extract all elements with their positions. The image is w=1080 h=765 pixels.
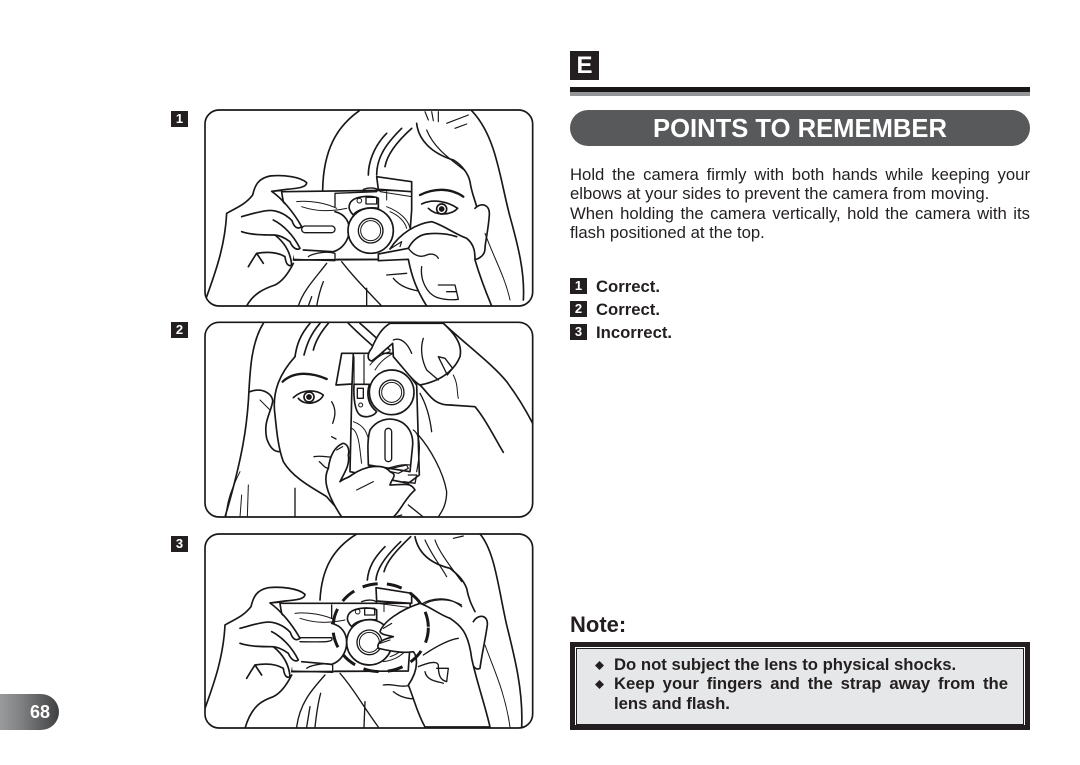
double header rule: [570, 87, 1030, 96]
left hand: [205, 587, 305, 728]
panel badge 3: 3: [176, 536, 183, 551]
body text: When holding the camera vertically, hold the camera with its: [570, 204, 1030, 223]
note text 2: Keep your fingers and the strap away from the: [614, 674, 1008, 693]
camera: [282, 190, 412, 260]
panel badge 1: 1: [176, 111, 183, 126]
illustration panel 2: correct vertical grip: [205, 322, 533, 517]
body text: [570, 165, 1030, 242]
camera: [350, 353, 419, 483]
right hand over lens: [378, 603, 490, 727]
illustration panel 3: incorrect grip with dashed circle over lens and flash: [205, 534, 533, 728]
note text 1: Do not subject the lens to physical shocks.: [614, 655, 956, 674]
list of captions: [570, 277, 672, 342]
note bullet 1: [595, 661, 604, 670]
section letter E: [570, 51, 599, 80]
list of captions: Incorrect.: [596, 323, 672, 342]
camera: [280, 603, 412, 672]
body text: flash positioned at the top.: [570, 223, 765, 242]
page number tab: [0, 694, 59, 730]
note text 3: lens and flash.: [614, 694, 730, 713]
list of captions: 2: [575, 301, 582, 316]
list of captions: 3: [575, 324, 582, 339]
title pill: POINTS TO REMEMBER: [653, 115, 947, 143]
upper hand: [368, 323, 461, 385]
panel badge 1: [171, 111, 188, 127]
list of captions: 1: [575, 278, 582, 293]
panel badge 3: [171, 536, 188, 552]
illustrations: [204, 109, 534, 729]
list of captions: Correct.: [596, 300, 660, 319]
section letter E: E: [576, 52, 592, 79]
panel badge 2: [171, 322, 188, 338]
dashed circle: [333, 584, 428, 672]
body text: Hold the camera firmly with both hands while keeping your: [570, 165, 1030, 184]
title pill: [570, 110, 1030, 146]
body text: elbows at your sides to prevent the camera from moving.: [570, 184, 989, 203]
page number tab: 68: [30, 702, 50, 722]
panel badge 2: 2: [176, 322, 183, 337]
note box: [570, 642, 1030, 730]
list of captions: Correct.: [596, 277, 660, 296]
illustration panel 1: correct horizontal grip: [205, 110, 533, 306]
note bullet 2: [595, 680, 604, 689]
lower hand: [326, 443, 415, 517]
left hand: [282, 202, 294, 260]
right hand: [379, 230, 474, 292]
note heading: Note:: [570, 612, 626, 637]
